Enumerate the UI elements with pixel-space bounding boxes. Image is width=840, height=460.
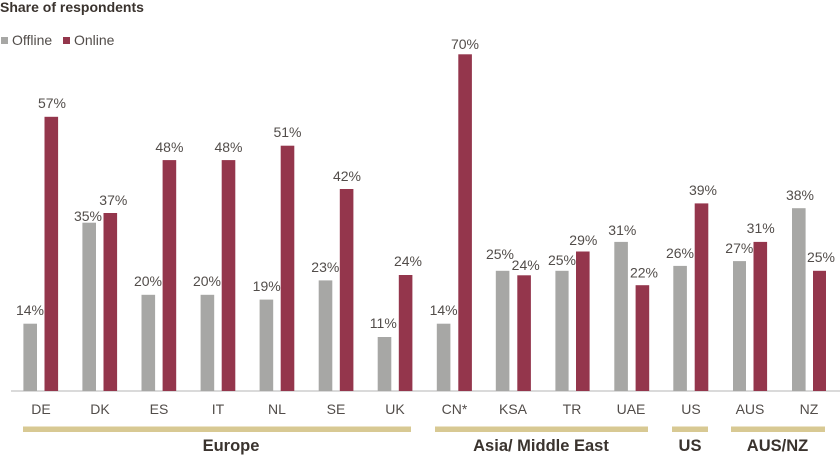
group: NL: 19% — [253, 278, 281, 294]
group: ES: ES — [150, 401, 168, 417]
group: KSA: 24% — [512, 257, 540, 273]
legend: Offline — [12, 32, 52, 48]
group: US: 39% — [689, 182, 717, 198]
legend: Online — [74, 32, 115, 48]
group: SE: SE — [327, 401, 345, 417]
group: SE — [311, 168, 361, 417]
region: Europe: Europe — [203, 437, 259, 455]
group: US — [666, 182, 717, 417]
group: ES: 48% — [155, 139, 183, 155]
region: AUS/NZ: AUS/NZ — [747, 437, 808, 455]
group: DK: 37% — [99, 192, 127, 208]
group: UK: 24% — [394, 253, 422, 269]
group: TR — [548, 232, 597, 417]
group: UAE — [608, 222, 658, 417]
group: NZ: 25% — [807, 249, 835, 265]
group: IT: IT — [212, 401, 225, 417]
group: TR: 25% — [548, 252, 576, 268]
group: SE: 23% — [311, 259, 339, 275]
group: AUS: AUS — [736, 401, 764, 417]
group: UK: UK — [385, 401, 405, 417]
group: CN: CN* — [442, 401, 468, 417]
region: AUS/NZ — [731, 426, 825, 455]
group: NZ: 38% — [786, 187, 814, 203]
group: DE — [16, 95, 66, 417]
group: US: US — [681, 401, 701, 417]
legend — [1, 32, 115, 48]
group: TR: TR — [563, 401, 581, 417]
baseline axis — [11, 390, 840, 392]
group: DK — [74, 192, 127, 417]
group: ES — [134, 139, 183, 417]
group: IT — [193, 139, 243, 417]
group: NZ — [786, 187, 835, 417]
group: UK: 11% — [370, 315, 397, 331]
group: IT: 48% — [214, 139, 243, 155]
group: DE: DE — [31, 401, 51, 417]
group: CN: 14% — [430, 302, 458, 318]
region: Europe — [23, 426, 411, 455]
group: DK: 35% — [74, 208, 102, 224]
region: US: US — [679, 437, 701, 455]
group: AUS: 27% — [725, 240, 753, 256]
group: NL: 51% — [273, 124, 302, 140]
group: DE: 57% — [38, 95, 66, 111]
region: Asia / Middle East — [435, 426, 648, 455]
group: DK: DK — [90, 401, 110, 417]
group: DE: 14% — [16, 302, 44, 318]
group: UAE: UAE — [617, 401, 645, 417]
group: UAE: 31% — [608, 222, 636, 238]
group: US: 26% — [666, 245, 694, 261]
group: SE: 42% — [333, 168, 361, 184]
group: NL — [253, 124, 302, 417]
group: TR: 29% — [569, 232, 597, 248]
group: UK — [370, 253, 422, 417]
group: AUS — [725, 220, 775, 417]
group: KSA — [486, 246, 540, 417]
group: NL: NL — [268, 401, 286, 417]
group: AUS: 31% — [747, 220, 775, 236]
group: IT: 20% — [193, 273, 221, 289]
group: CN: 70% — [451, 36, 479, 52]
region: Asia / Middle East: Asia/ Middle East — [473, 437, 609, 455]
group: NZ: NZ — [800, 401, 819, 417]
group: UAE: 22% — [630, 264, 658, 280]
group: ES: 20% — [134, 273, 162, 289]
group: KSA: KSA — [499, 401, 528, 417]
region: US — [672, 426, 708, 455]
group: CN — [430, 36, 479, 417]
group: KSA: 25% — [486, 246, 514, 262]
